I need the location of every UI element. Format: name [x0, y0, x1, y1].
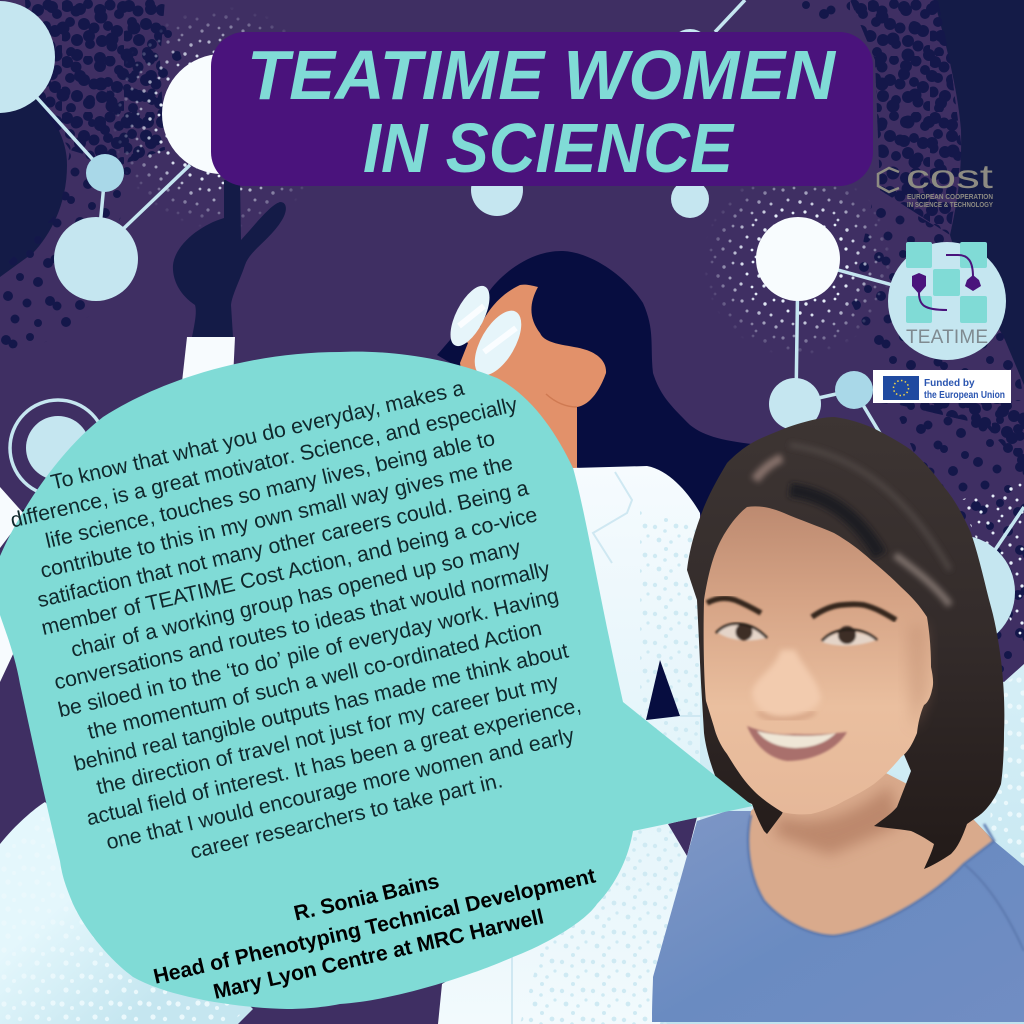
quote text: behind real tangible outputs has made me think about [71, 638, 571, 776]
background light region right [600, 560, 1024, 1024]
neck shadow [775, 785, 900, 855]
logo: Funded by the European Union: the European Union [924, 390, 1005, 401]
title text [247, 36, 836, 187]
mouth [747, 726, 847, 761]
nose [752, 650, 821, 717]
quote text: career researchers to take part in. [188, 768, 505, 864]
quote text: the momentum of such a well co-ordinated Action [85, 616, 544, 744]
hair highlights [755, 445, 950, 605]
attribution: R. Sonia Bains [292, 870, 441, 926]
logo: Funded by the European Union: Funded by [924, 378, 975, 389]
background: navy shapes [0, 0, 1024, 385]
nose shadow [758, 712, 815, 720]
eye: left [716, 624, 767, 640]
title banner [211, 32, 873, 187]
quote text: be siloed in to the ‘to do’ pile of everyday work. Having [56, 583, 561, 722]
left sleeve fragments [0, 487, 25, 682]
quote text: actual field of interest. It has been a great experience, [84, 693, 583, 830]
background: speckle texture [0, 0, 1024, 682]
title text: TEATIME WOMEN [247, 36, 836, 114]
quote text: the direction of travel not just for my career but my [94, 669, 561, 799]
bottom-left light shape [0, 802, 253, 1024]
molecule network [0, 0, 1024, 649]
right speckle [990, 670, 1024, 860]
quote text: one that I would encourage more women and early [104, 723, 577, 854]
coat seam lines [512, 472, 710, 1024]
quote text: member of TEATIME Cost Action, and being a co-vice [39, 502, 540, 640]
shirt seam [964, 864, 1024, 951]
quote text: conversations and routes to ideas that would normally [52, 557, 552, 694]
lab coat [438, 466, 700, 1024]
quote text: contribute to this in my own small way gives me the [38, 451, 515, 583]
quote text: satifaction that not many other careers could. Being a [35, 476, 531, 612]
attribution: Head of Phenotyping Technical Development [151, 865, 598, 989]
purple gap [668, 817, 697, 856]
attribution: Mary Lyon Centre at MRC Harwell [211, 905, 546, 1004]
raised hand [173, 180, 286, 337]
logo: TEATIME: TEATIME [906, 327, 988, 348]
quote text: chair of a working group has opened up so many [69, 535, 523, 662]
face shading right [908, 625, 928, 730]
hair [687, 417, 1004, 869]
neckline [748, 815, 994, 936]
face [704, 506, 933, 814]
eyebrows [707, 598, 896, 620]
coat lapel triangle [646, 660, 680, 720]
sleeve [180, 337, 235, 400]
logo: COST: cost [906, 158, 993, 195]
photo: portrait of R. Sonia Bains [652, 417, 1024, 1024]
quote text: life science, touches so many lives, being able to [43, 426, 497, 553]
hair [437, 251, 760, 580]
shirt [652, 811, 1024, 1024]
logo: COST: EUROPEAN COOPERATION [907, 192, 993, 201]
bottom-left speckle [0, 810, 240, 1024]
coat speckle [520, 510, 705, 1024]
face [457, 285, 606, 470]
logo: COST [878, 158, 993, 209]
quote text: To know that what you do everyday, makes a [48, 376, 467, 494]
logo: COST: IN SCIENCE & TECHNOLOGY [907, 200, 993, 209]
neck and chest [748, 770, 994, 936]
speech bubble [0, 352, 753, 1009]
logo: Funded by the European Union [873, 370, 1011, 403]
quote text: difference, is a great motivator. Science, and especially [8, 392, 520, 532]
title text: IN SCIENCE [363, 109, 735, 187]
quote text [8, 376, 583, 864]
chin line [546, 394, 577, 407]
eye: right [822, 626, 877, 646]
logo: TEATIME [888, 242, 1006, 360]
glasses [443, 280, 531, 383]
